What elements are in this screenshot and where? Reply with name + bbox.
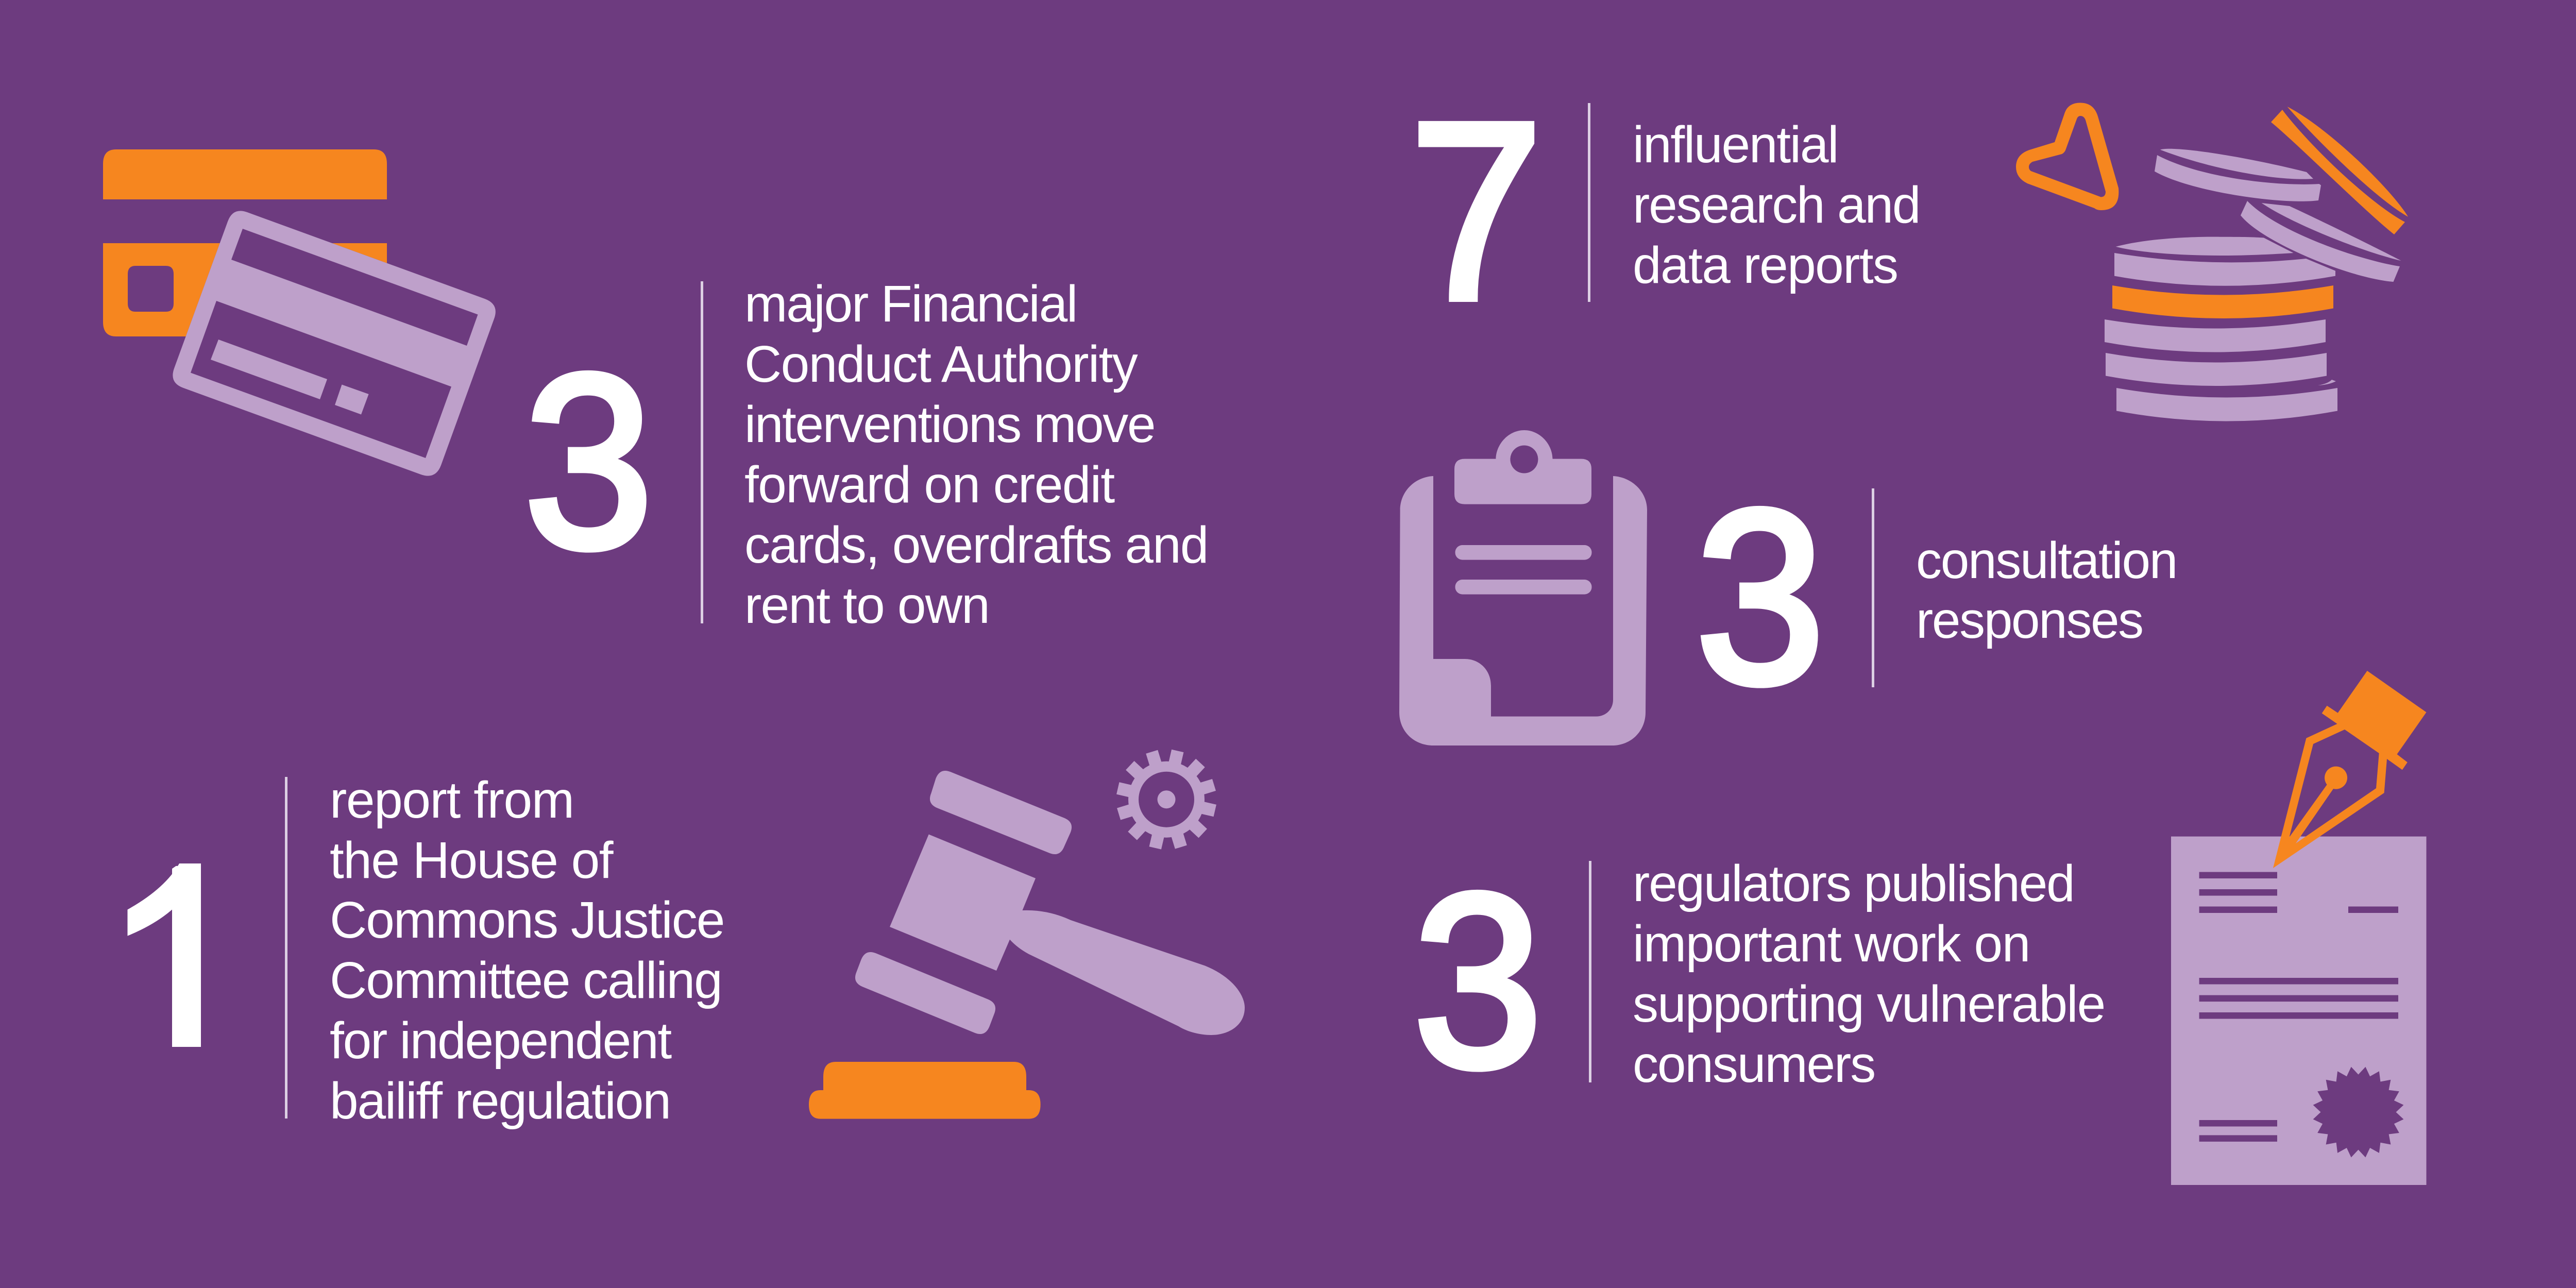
text: interventions: Conduct Authority [744,335,1138,393]
text: report: the House of [330,832,614,889]
icon: coin stack [2105,237,2337,421]
panel: justice committee report [112,750,1245,1130]
icon: credit cards [103,149,496,476]
panel: consultation responses [1399,430,2177,745]
text: regulators [1633,855,2105,1093]
text: reports: research and [1633,176,1920,234]
icon: triangle outline [2016,103,2119,210]
text: report: bailiff regulation [330,1072,670,1130]
icon: fountain pen nib [2273,671,2427,868]
text: interventions: forward on credit [744,456,1115,514]
icon: falling coins [2155,107,2408,282]
number: 1 report: 1 [112,815,252,1097]
icon: clipboard [1399,430,1647,745]
text: interventions: cards, overdrafts and [744,516,1208,574]
number: 3 interventions: 3 [524,323,653,599]
icon: gavel head and handle [855,771,1245,1035]
number: 3 responses: 3 [1696,458,1825,735]
text: responses: consultation [1916,532,2177,589]
text: interventions: interventions move [744,396,1155,453]
icon: document [2171,837,2427,1185]
text: reports: data reports [1633,236,1897,294]
text: reports: influential [1633,116,1838,174]
icon: gavel block [809,1062,1041,1119]
text: report: report from [330,771,574,829]
text: regulators: consumers [1633,1036,1875,1093]
panel: research and data reports [1410,70,2408,421]
text: interventions [744,275,1208,634]
icon: gear [1116,750,1216,850]
text: report: Commons Justice [330,891,724,949]
panel: credit card interventions [103,149,1208,634]
text: interventions: rent to own [744,577,989,634]
text: regulators: important work on [1633,915,2030,973]
text: report [330,771,724,1130]
number: 7 reports: 7 [1410,70,1543,352]
icon: coins and triangle [2016,103,2408,421]
number: 3 regulators: 3 [1413,842,1543,1118]
text: responses [1916,532,2177,649]
icon: gavel and gear [809,750,1245,1119]
text: report: Committee calling [330,952,722,1009]
icon: document with pen [2171,671,2427,1185]
text: responses: responses [1916,591,2143,649]
text: reports [1633,116,1920,294]
text: regulators: regulators published [1633,855,2074,912]
text: regulators: supporting vulnerable [1633,975,2105,1033]
text: interventions: major Financial [744,275,1077,333]
text: report: for independent [330,1012,672,1070]
panel: vulnerable consumers [1413,671,2427,1185]
number: 1 report [128,863,201,1047]
